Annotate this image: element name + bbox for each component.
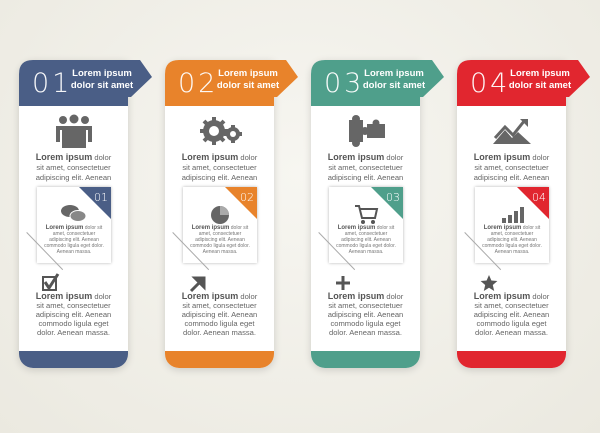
icon: cart xyxy=(355,205,378,224)
card 2 xyxy=(165,60,274,368)
card 1 xyxy=(19,60,128,368)
text 1b: Lorem ipsum dolor sit amet, consectetuer adipiscing elit. Aenean commodo ligula eget dolor. Aenean massa. xyxy=(36,291,111,337)
header 1 xyxy=(19,60,152,106)
icon: bars xyxy=(502,207,524,223)
header 3 xyxy=(311,60,444,106)
box 1: 01 xyxy=(94,191,108,204)
box 2 xyxy=(183,187,257,263)
box 3 xyxy=(329,187,403,263)
box 1: Lorem ipsum dolor sit amet, consectetuer adipiscing elit. Aenean commodo ligula eget dolor. Aenean massa. xyxy=(44,225,104,255)
number 01: 01 xyxy=(32,68,72,99)
icon: check xyxy=(42,273,60,291)
card 4: Lorem ipsum dolor sit amet, consectetuer adipiscing elit. Aenean commodo ligula eget dolor. Aenean massa. xyxy=(474,291,549,337)
card 3: Lorem ipsum dolor sit amet, consectetuer adipiscing elit. Aenean xyxy=(328,152,403,182)
icon: plus xyxy=(336,276,350,290)
card 3: Lorem ipsum dolor sit amet, consectetuer adipiscing elit. Aenean commodo ligula eget dolor. Aenean massa. xyxy=(328,291,403,337)
card 2: 02 xyxy=(178,68,218,99)
icon: star xyxy=(480,275,498,291)
box 4: 04 xyxy=(532,191,546,204)
title 1: Lorem ipsum dolor sit amet xyxy=(71,68,133,91)
icon: arrow xyxy=(190,276,206,292)
card 4 xyxy=(457,60,566,368)
card 2: Lorem ipsum dolor sit amet, consectetuer adipiscing elit. Aenean xyxy=(182,152,257,182)
icon: puzzle xyxy=(349,115,385,147)
box 4: Lorem ipsum dolor sit amet, consectetuer adipiscing elit. Aenean commodo ligula eget dolor. Aenean massa. xyxy=(482,225,542,255)
title 4: Lorem ipsum dolor sit amet xyxy=(509,68,571,91)
box 2: Lorem ipsum dolor sit amet, consectetuer adipiscing elit. Aenean commodo ligula eget dolor. Aenean massa. xyxy=(190,225,250,255)
text 1: Lorem ipsum dolor sit amet, consectetuer adipiscing elit. Aenean xyxy=(36,152,111,182)
box 4 xyxy=(475,187,549,263)
box 3: 03 xyxy=(386,191,400,204)
card 2: Lorem ipsum dolor sit amet, consectetuer adipiscing elit. Aenean commodo ligula eget dolor. Aenean massa. xyxy=(182,291,257,337)
title 3: Lorem ipsum dolor sit amet xyxy=(363,68,425,91)
title 2: Lorem ipsum dolor sit amet xyxy=(217,68,279,91)
icon: mountain chart xyxy=(493,119,531,144)
box 3: Lorem ipsum dolor sit amet, consectetuer adipiscing elit. Aenean commodo ligula eget dolor. Aenean massa. xyxy=(336,225,396,255)
box 2: 02 xyxy=(240,191,254,204)
card 3: 03 xyxy=(324,68,364,99)
icon: pie xyxy=(211,206,229,224)
card 4: 04 xyxy=(470,68,510,99)
card 3 xyxy=(311,60,420,368)
card 4: Lorem ipsum dolor sit amet, consectetuer adipiscing elit. Aenean xyxy=(474,152,549,182)
icon: chat xyxy=(61,205,86,221)
box 1 xyxy=(37,187,111,263)
icon: gears xyxy=(200,117,242,145)
header 2 xyxy=(165,60,298,106)
icon: people xyxy=(56,114,92,148)
header 4 xyxy=(457,60,590,106)
